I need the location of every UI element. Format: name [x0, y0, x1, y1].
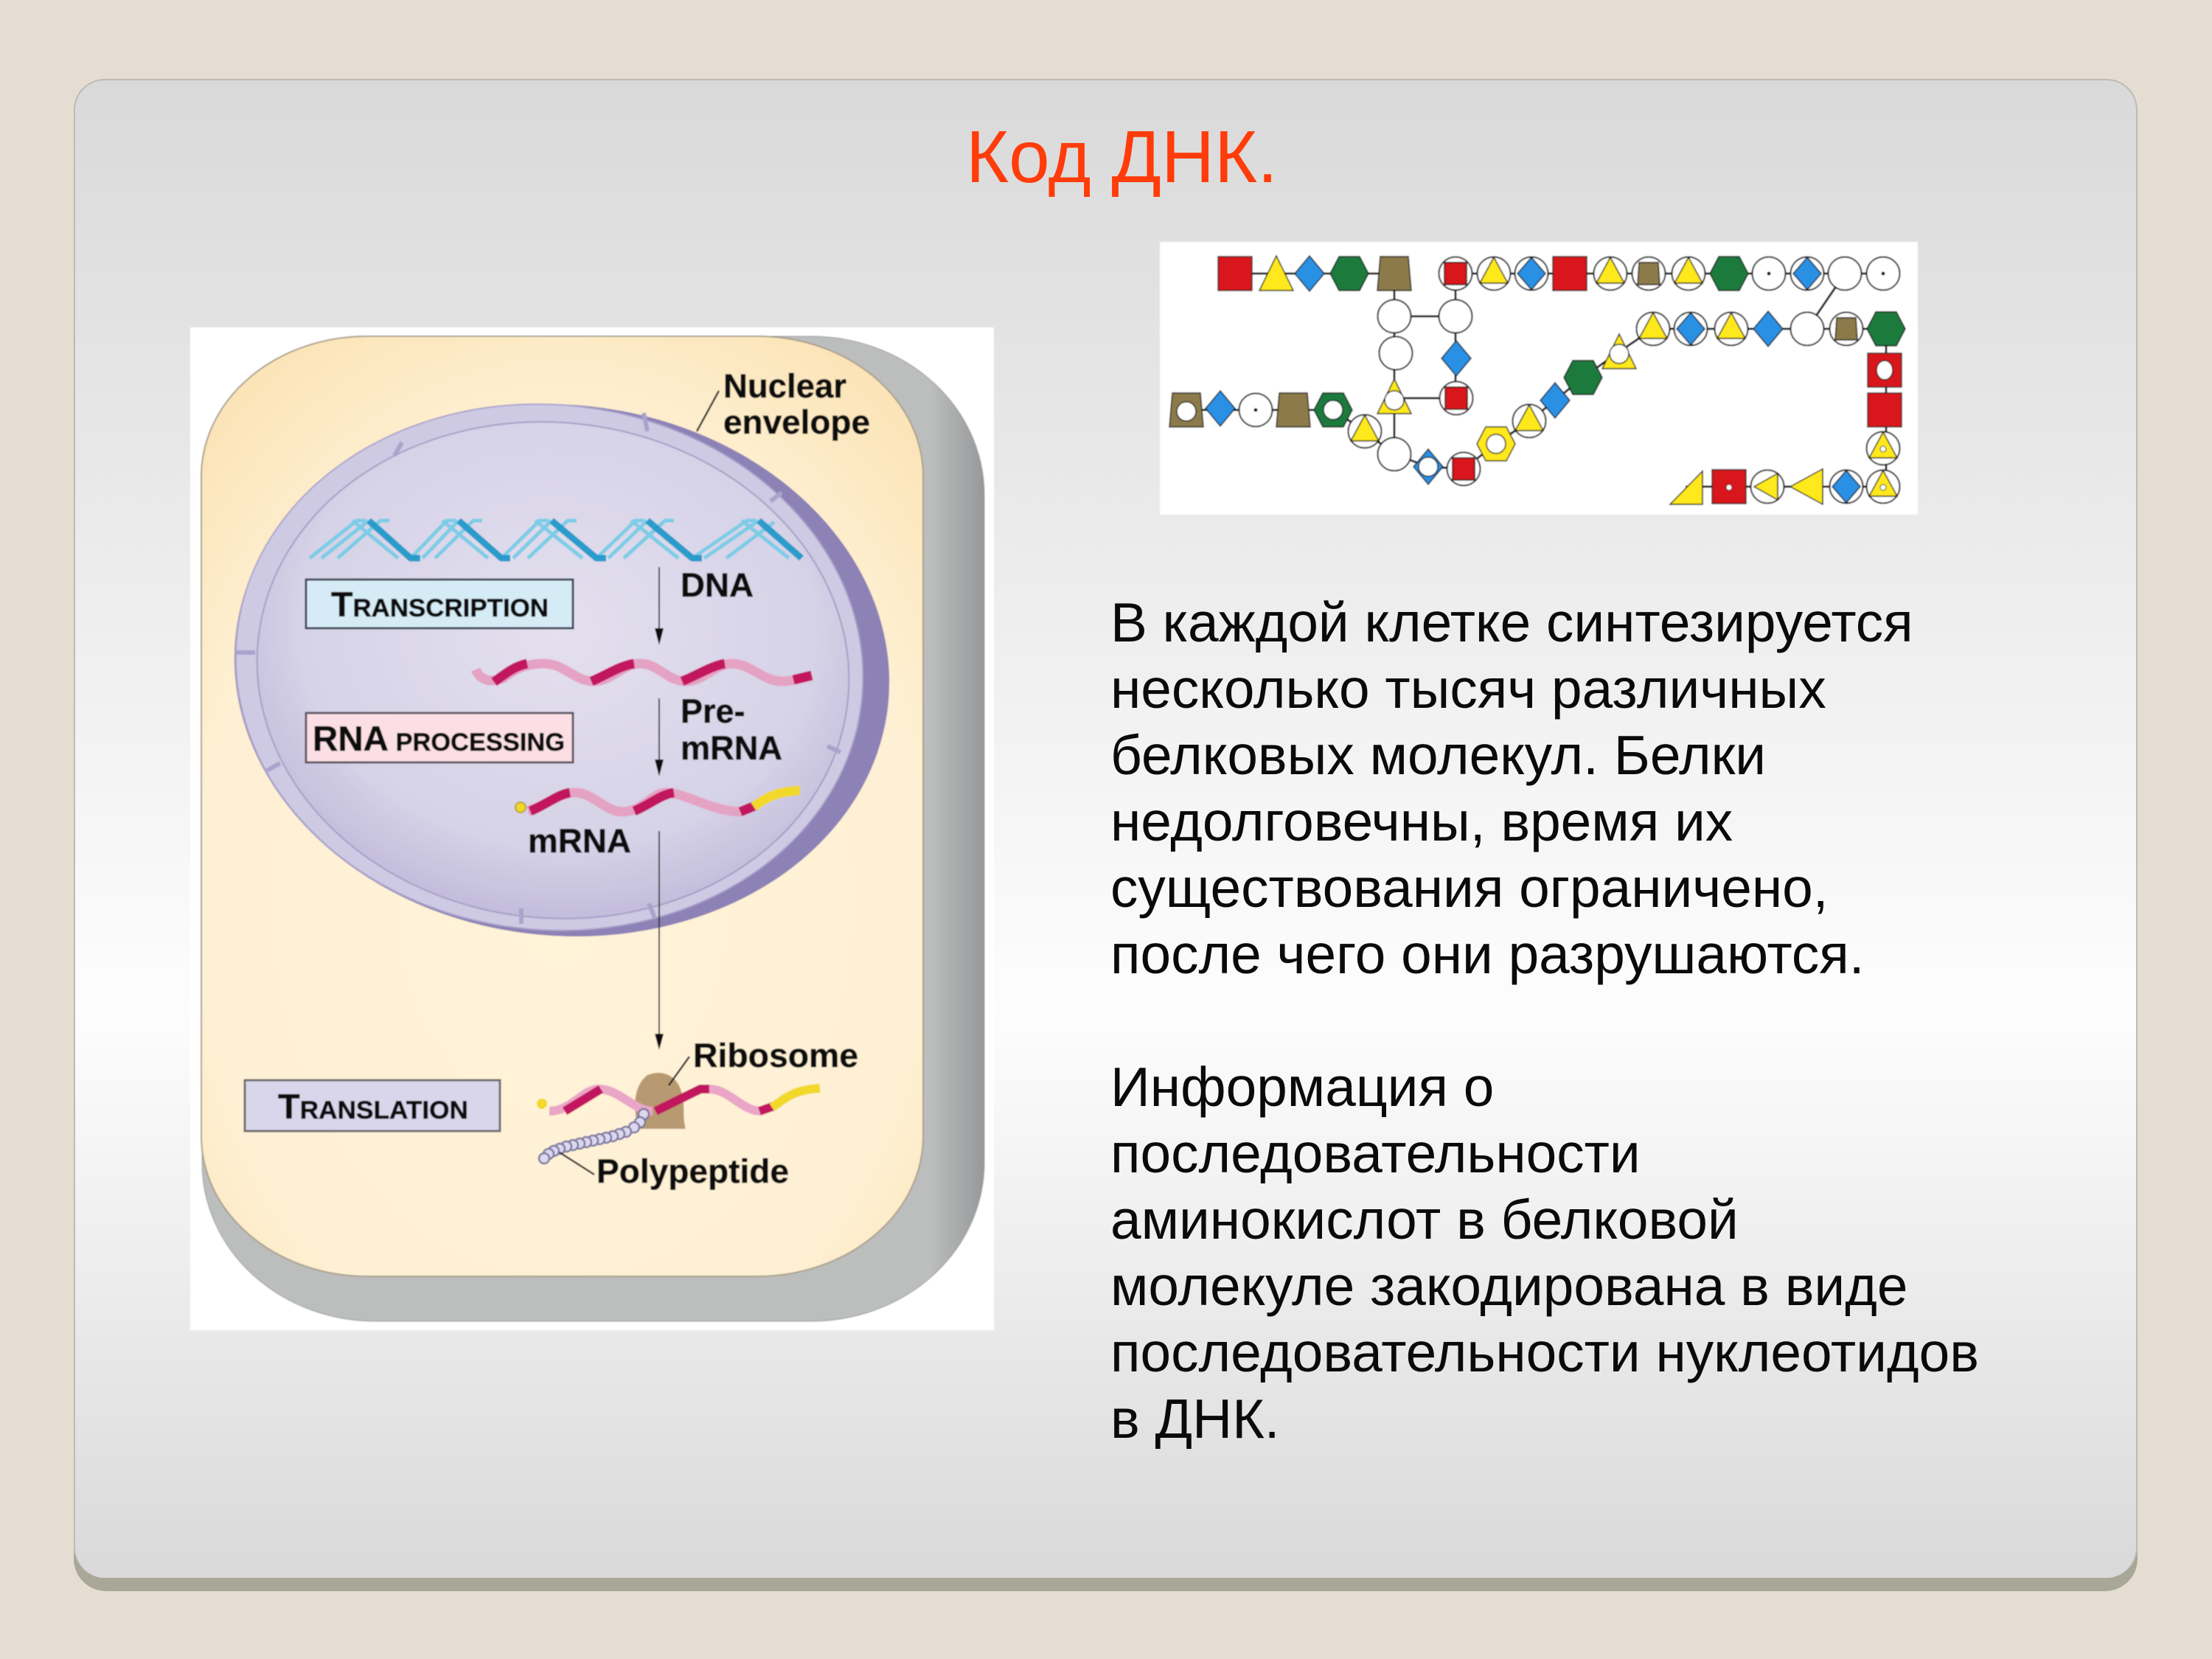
- box: translation: TRANSLATION: [278, 1087, 468, 1126]
- ribosome and translation ribbon: [537, 1073, 820, 1129]
- leader lines: [560, 391, 719, 1175]
- nucleus: [208, 372, 916, 969]
- labels: Polypeptide: [597, 1152, 789, 1190]
- mRNA ribbon: [515, 790, 800, 813]
- box: RNA processing: RNA PROCESSING: [313, 719, 565, 758]
- body text: существования ограничено,: [1110, 857, 1829, 919]
- nuclear pores: [236, 413, 841, 924]
- chain: central branch: [1377, 299, 1473, 414]
- polypeptide: [539, 1109, 649, 1164]
- image: protein chain diagram: [1160, 242, 1918, 515]
- cell shadow: [202, 336, 984, 1321]
- labels: mRNA: [681, 729, 782, 767]
- labels: envelope: [723, 403, 870, 441]
- box: transcription: [306, 580, 573, 628]
- labels: mRNA: [528, 822, 631, 860]
- body text: аминокислот в белковой: [1110, 1189, 1739, 1251]
- body text: Информация о: [1110, 1056, 1494, 1118]
- body text: [1110, 591, 1979, 1450]
- body text: после чего они разрушаются.: [1110, 923, 1865, 985]
- body text: последовательности нуклеотидов: [1110, 1321, 1979, 1383]
- arrows: [655, 567, 664, 1050]
- chain: lower winding row: [1169, 334, 1636, 485]
- body text: последовательности: [1110, 1122, 1641, 1184]
- chain connectors: [1186, 274, 1886, 487]
- chain: right column and bottom row: [1670, 353, 1902, 504]
- labels: Nuclear: [723, 367, 846, 405]
- pre-mRNA ribbon: [476, 664, 812, 682]
- body text: В каждой клетке синтезируется: [1110, 591, 1913, 653]
- labels: DNA: [681, 566, 754, 604]
- body text: недолговечны, время их: [1110, 790, 1733, 852]
- body text: в ДНК.: [1110, 1388, 1280, 1450]
- DNA helix: [310, 521, 801, 558]
- box: translation: [245, 1080, 500, 1131]
- labels: Pre-: [681, 692, 745, 730]
- cytoplasm: [201, 336, 923, 1276]
- box: transcription: TRANSCRIPTION: [331, 585, 549, 624]
- title: Код ДНК.: [966, 116, 1278, 198]
- labels: [528, 367, 870, 1190]
- chain: top row: [1218, 256, 1899, 291]
- body text: молекуле закодирована в виде: [1110, 1255, 1907, 1317]
- labels: Ribosome: [693, 1037, 858, 1074]
- chain: second row: [1637, 311, 1905, 347]
- body text: белковых молекул. Белки: [1110, 724, 1766, 786]
- body text: несколько тысяч различных: [1110, 658, 1826, 720]
- image: cell diagram: [190, 327, 994, 1330]
